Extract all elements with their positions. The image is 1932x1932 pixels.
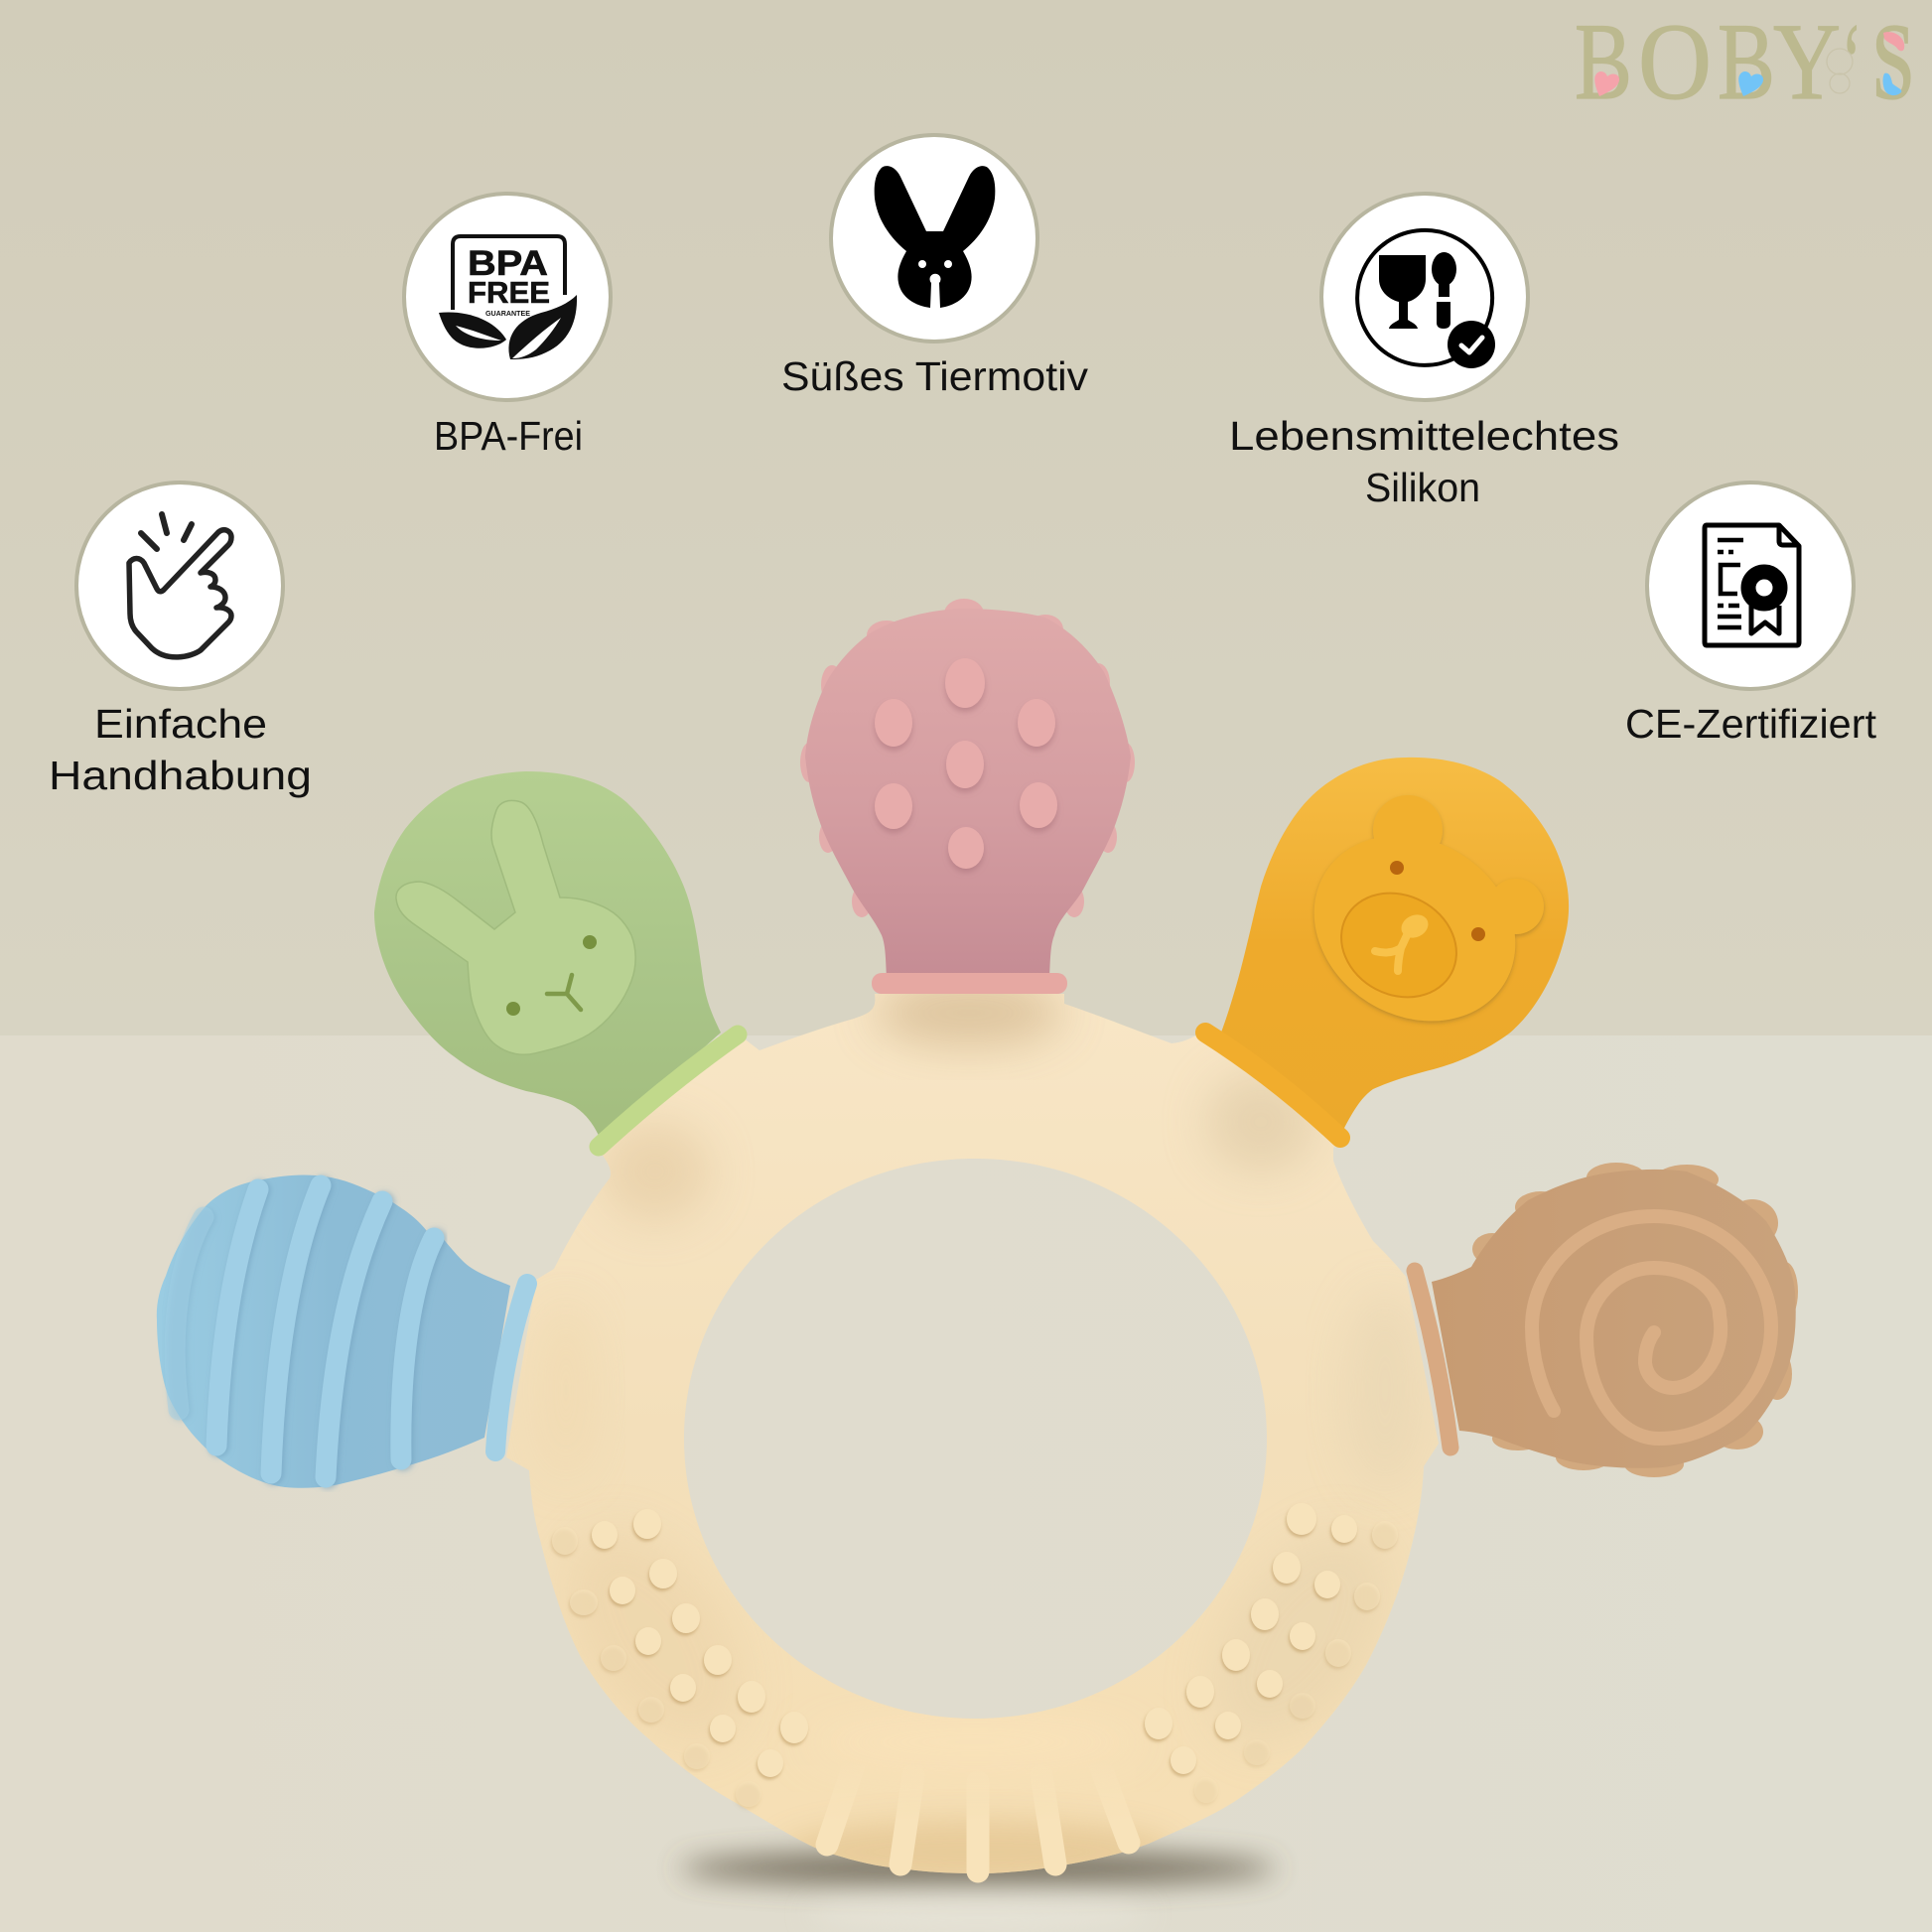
bear muzzle xyxy=(1323,874,1474,1017)
icon: certificate document xyxy=(1647,483,1854,689)
surface nubs xyxy=(875,658,1057,869)
background table xyxy=(0,1035,1932,1932)
label: Einfache xyxy=(94,701,267,747)
feature: CE-Zertifiziert xyxy=(1625,483,1877,747)
blue ribbed teether head xyxy=(157,1175,527,1488)
green collar xyxy=(599,1035,738,1147)
logo: BOBY'S: O xyxy=(1638,1,1712,122)
feature: BPA-Frei xyxy=(404,194,611,459)
feature: Einfache Handhabung xyxy=(49,483,312,798)
bunny emboss xyxy=(396,800,635,1054)
ring bottom teeth xyxy=(827,1765,1129,1871)
label: Süßes Tiermotiv xyxy=(781,353,1089,399)
bear emboss xyxy=(1279,795,1551,1058)
logo: BOBY'S: ‘ xyxy=(1842,1,1862,122)
spiral ridge xyxy=(1532,1216,1771,1439)
brown collar xyxy=(1415,1271,1450,1448)
brown spiral teether head xyxy=(1415,1163,1798,1477)
ring shading xyxy=(530,979,1426,1883)
bunny eyes and nose xyxy=(506,935,597,1016)
orange bear teether head xyxy=(1205,758,1569,1138)
blue collar xyxy=(495,1284,527,1451)
outer bumps xyxy=(1472,1163,1798,1477)
logo: BOBY'S xyxy=(1575,1,1915,122)
edge bumps xyxy=(800,599,1135,917)
floor shadow under teether xyxy=(680,1851,1276,1932)
ring texture dots xyxy=(552,1503,1398,1807)
background wall xyxy=(0,0,1932,1035)
icon: BPA free badge: GUARANTEE xyxy=(485,311,530,318)
label: CE-Zertifiziert xyxy=(1625,701,1877,747)
logo: BOBY'S: B xyxy=(1575,1,1632,122)
icon: BPA free badge: BPA xyxy=(468,244,548,283)
feature: Süßes Tiermotiv xyxy=(781,135,1089,399)
logo: BOBY'S: S xyxy=(1871,1,1915,122)
icon: food grade glass and spoon xyxy=(1321,194,1528,400)
icon: BPA free badge xyxy=(404,194,611,400)
pink collar xyxy=(872,973,1067,994)
bear eyes xyxy=(1390,861,1485,941)
label second line: Handhabung xyxy=(49,753,312,798)
label: BPA-Frei xyxy=(434,413,583,459)
pink bumpy teether head xyxy=(800,599,1135,994)
label second line: Silikon xyxy=(1365,465,1480,510)
feature: Lebensmittelechtes Silikon xyxy=(1229,194,1619,510)
icon: BPA free badge: FREE xyxy=(468,275,550,310)
teether product xyxy=(157,599,1798,1883)
orange collar xyxy=(1205,1033,1340,1138)
icon: snapping hand xyxy=(76,483,283,689)
label: Lebensmittelechtes xyxy=(1229,413,1619,459)
icon: bunny head xyxy=(831,135,1037,342)
ribs xyxy=(175,1185,434,1477)
logo: BOBY'S: Y xyxy=(1773,1,1841,122)
logo: BOBY'S: B xyxy=(1718,1,1775,122)
ring body xyxy=(506,979,1439,1883)
green bunny teether head xyxy=(374,771,738,1147)
